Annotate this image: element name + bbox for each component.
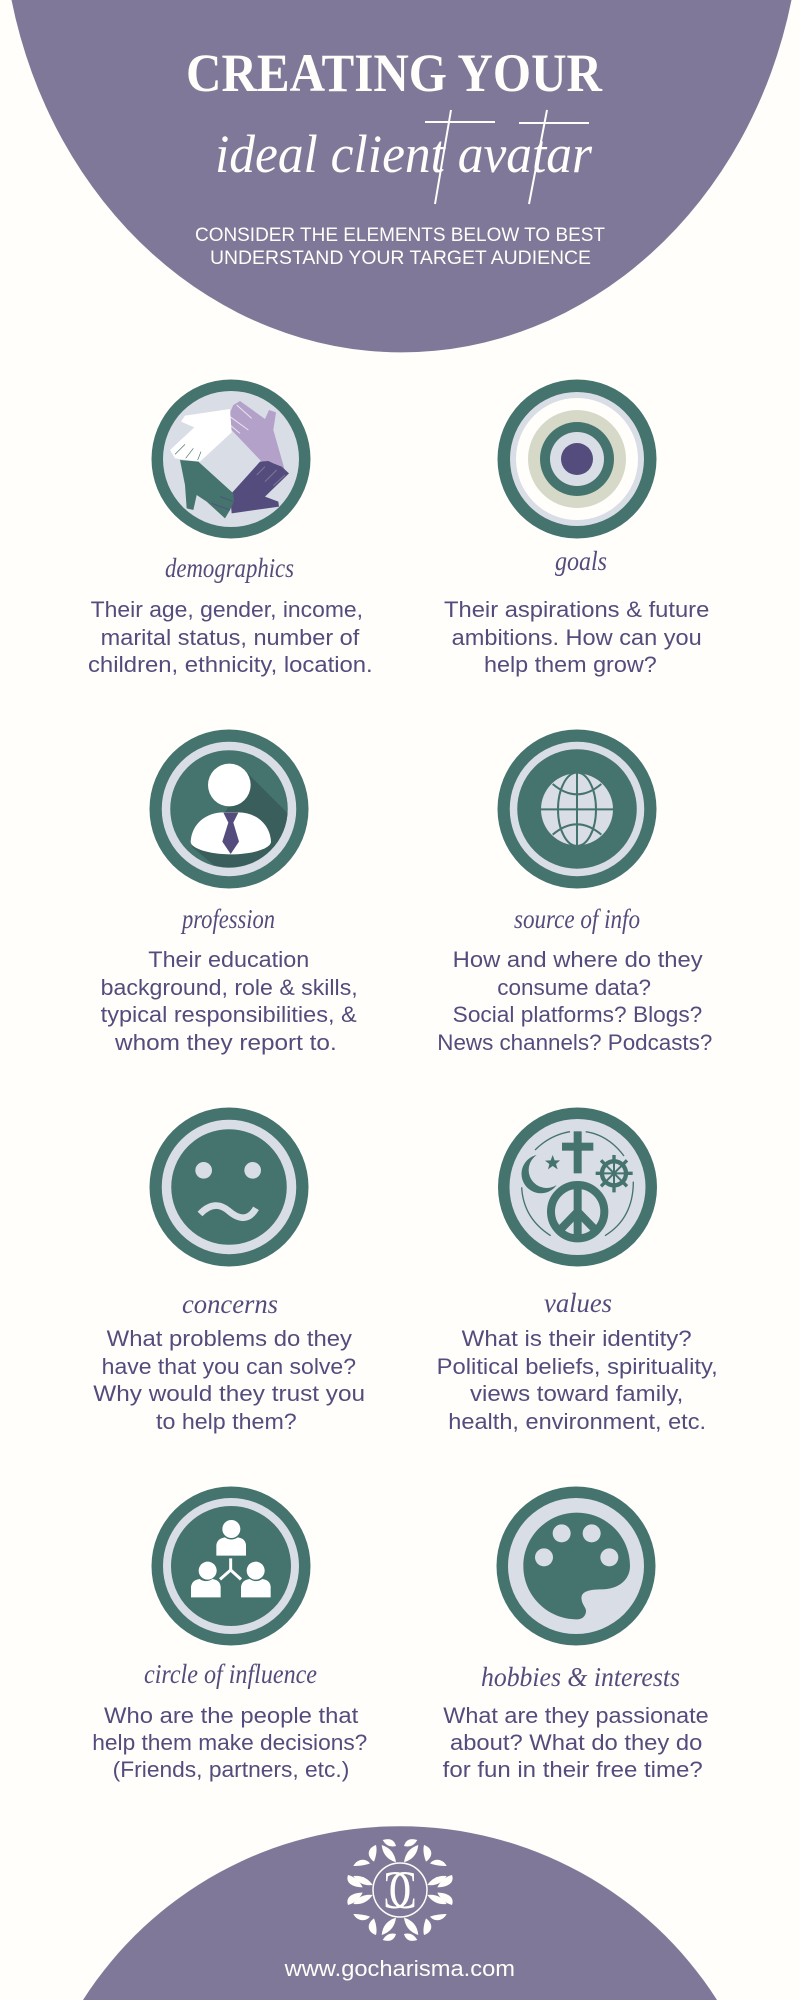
tagline: UNDERSTAND YOUR TARGET AUDIENCE (210, 247, 591, 269)
description: concerns: What problems do they (107, 1326, 353, 1351)
label: profession: profession (180, 904, 275, 934)
description: goals: Their aspirations & future (444, 597, 709, 622)
logo: C (383, 1860, 411, 1920)
icon: globe (498, 730, 656, 888)
description: source of info: How and where do they (453, 947, 703, 972)
footer panel (83, 1826, 717, 2000)
description: circle of influence: Who are the people that (104, 1703, 359, 1728)
description: hobbies and interests: What are they passionate (443, 1703, 709, 1728)
description: values (437, 1326, 718, 1434)
description: circle of influence (92, 1703, 367, 1782)
description: goals (444, 597, 709, 677)
description: profession (101, 947, 358, 1055)
description: profession: Their education (148, 947, 309, 972)
tagline (195, 224, 605, 269)
label: demographics: demographics (165, 553, 294, 583)
description: values: health, environment, etc. (448, 1409, 706, 1434)
label: values: values (544, 1288, 612, 1318)
description: concerns: to help them? (156, 1409, 297, 1434)
description: goals: ambitions. How can you (452, 625, 702, 650)
panel: circle of influence (92, 1486, 367, 1782)
tagline: CONSIDER THE ELEMENTS BELOW TO BEST (195, 224, 605, 246)
description: concerns: Why would they trust you (93, 1381, 365, 1406)
panel: values (437, 1108, 718, 1434)
description: hobbies and interests: for fun in their free time? (443, 1757, 703, 1782)
description: demographics: Their age, gender, income, (91, 597, 363, 622)
description: circle of influence: help them make decisions? (92, 1730, 367, 1755)
description: concerns (93, 1326, 365, 1434)
header shape (12, 0, 792, 352)
logo: C (389, 1860, 417, 1920)
description: values: What is their identity? (462, 1326, 692, 1351)
script subtitle: ideal client avatar (215, 124, 592, 184)
description: source of info: Social platforms? Blogs? (453, 1002, 702, 1027)
website: www.gocharisma.com (284, 1956, 515, 1981)
icon: professional person (150, 730, 308, 888)
icon: paint palette (496, 1486, 656, 1646)
script subtitle swashes (425, 110, 589, 204)
label: source of info: source of info (514, 904, 640, 934)
logo (347, 1839, 453, 1941)
description: demographics: children, ethnicity, location. (88, 652, 373, 677)
icon: belief symbols (498, 1108, 657, 1266)
title: CREATING YOUR (186, 43, 603, 103)
description: profession: background, role & skills, (101, 975, 358, 1000)
header panel (12, 0, 792, 352)
panel: profession (101, 730, 358, 1055)
panel: demographics (88, 380, 373, 677)
panel: source of info (437, 730, 712, 1055)
label: circle of influence: circle of influence (144, 1659, 317, 1689)
description: demographics: marital status, number of (101, 625, 360, 650)
panel: hobbies and interests (443, 1486, 709, 1782)
icon: connected people (152, 1486, 310, 1646)
description: profession: typical responsibilities, & (101, 1002, 357, 1027)
description: values: views toward family, (470, 1381, 683, 1406)
label: goals: goals (555, 546, 607, 576)
panel: goals (444, 380, 709, 677)
description: source of info (437, 947, 712, 1055)
description: profession: whom they report to. (114, 1030, 337, 1055)
icon: worried face (150, 1108, 308, 1266)
description: concerns: have that you can solve? (102, 1354, 356, 1379)
label: hobbies and interests: hobbies & interests (481, 1662, 680, 1692)
label: concerns: concerns (182, 1289, 278, 1319)
description: demographics (88, 597, 373, 677)
icon: target (498, 380, 656, 538)
description: hobbies and interests: about? What do they do (450, 1730, 702, 1755)
description: values: Political beliefs, spirituality, (437, 1354, 718, 1379)
description: source of info: consume data? (497, 975, 651, 1000)
description: circle of influence: (Friends, partners, etc.) (113, 1757, 349, 1782)
footer shape (83, 1826, 717, 2000)
description: goals: help them grow? (484, 652, 657, 677)
description: hobbies and interests (443, 1703, 709, 1782)
icon: four hands (152, 380, 310, 538)
panel: concerns (93, 1108, 365, 1434)
description: source of info: News channels? Podcasts? (437, 1030, 712, 1055)
